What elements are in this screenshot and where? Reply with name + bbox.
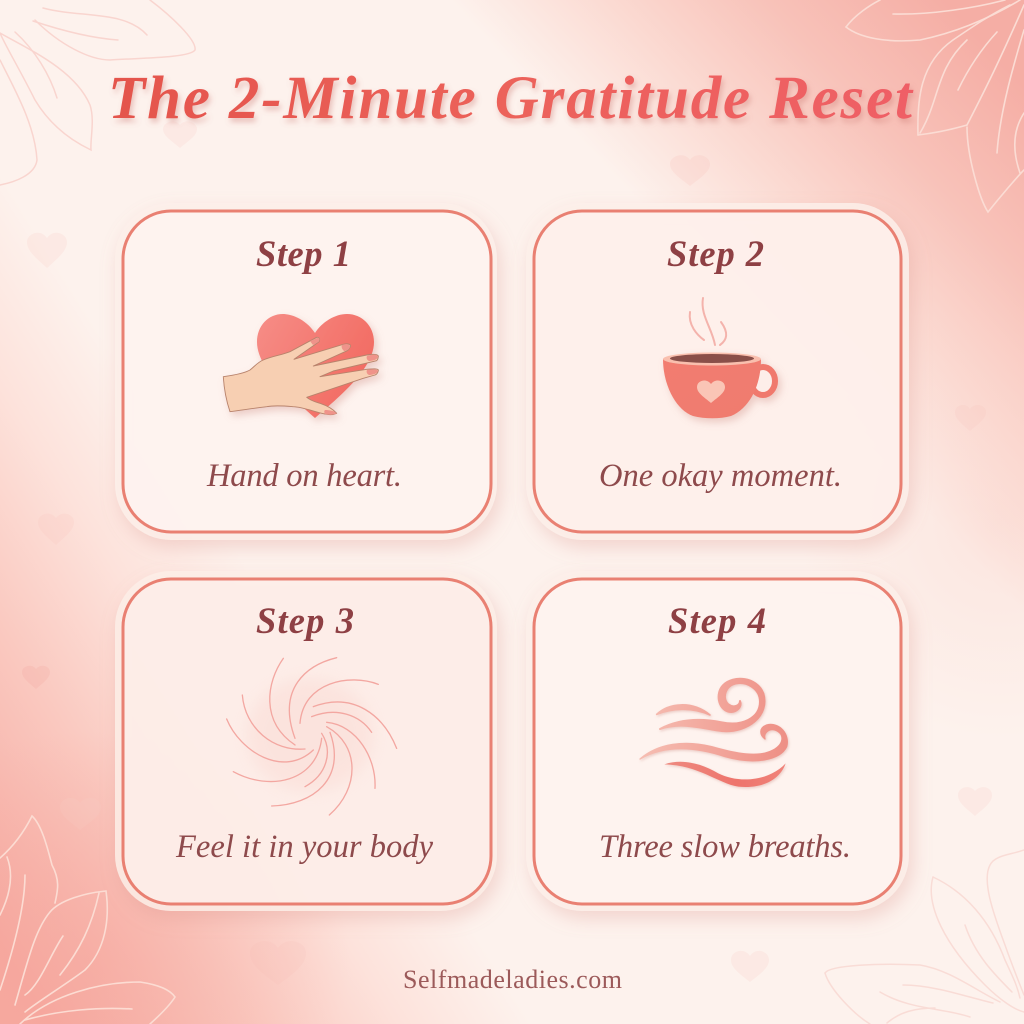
panel: step 1 — [115, 203, 497, 540]
panel: step 3 — [115, 571, 497, 911]
panel: step 2 — [526, 203, 909, 540]
heading: step 4: Step 4 — [668, 600, 766, 641]
icon: wind breaths — [640, 679, 787, 787]
caption: step 4: Three slow breaths. — [599, 829, 851, 865]
heading: step 3: Step 3 — [256, 600, 354, 641]
flower: top left — [0, 0, 195, 185]
icon: hand on heart — [223, 314, 378, 418]
footer website: Selfmadeladies.com — [403, 965, 622, 994]
flower: bottom left — [0, 816, 175, 1024]
icon: body swirl — [227, 658, 397, 815]
flower: bottom right — [825, 850, 1024, 1024]
caption: step 3: Feel it in your body — [175, 829, 434, 865]
panel: step 4 — [526, 571, 909, 911]
heading: step 1: Step 1 — [256, 233, 351, 274]
background hearts — [22, 121, 992, 985]
caption: step 1: Hand on heart. — [206, 458, 402, 494]
caption: step 2: One okay moment. — [599, 458, 842, 494]
title: The 2-Minute Gratitude Reset — [108, 65, 914, 132]
flower: top right — [846, 0, 1024, 212]
icon: coffee cup with steam — [663, 298, 775, 418]
heading: step 2: Step 2 — [667, 233, 764, 274]
